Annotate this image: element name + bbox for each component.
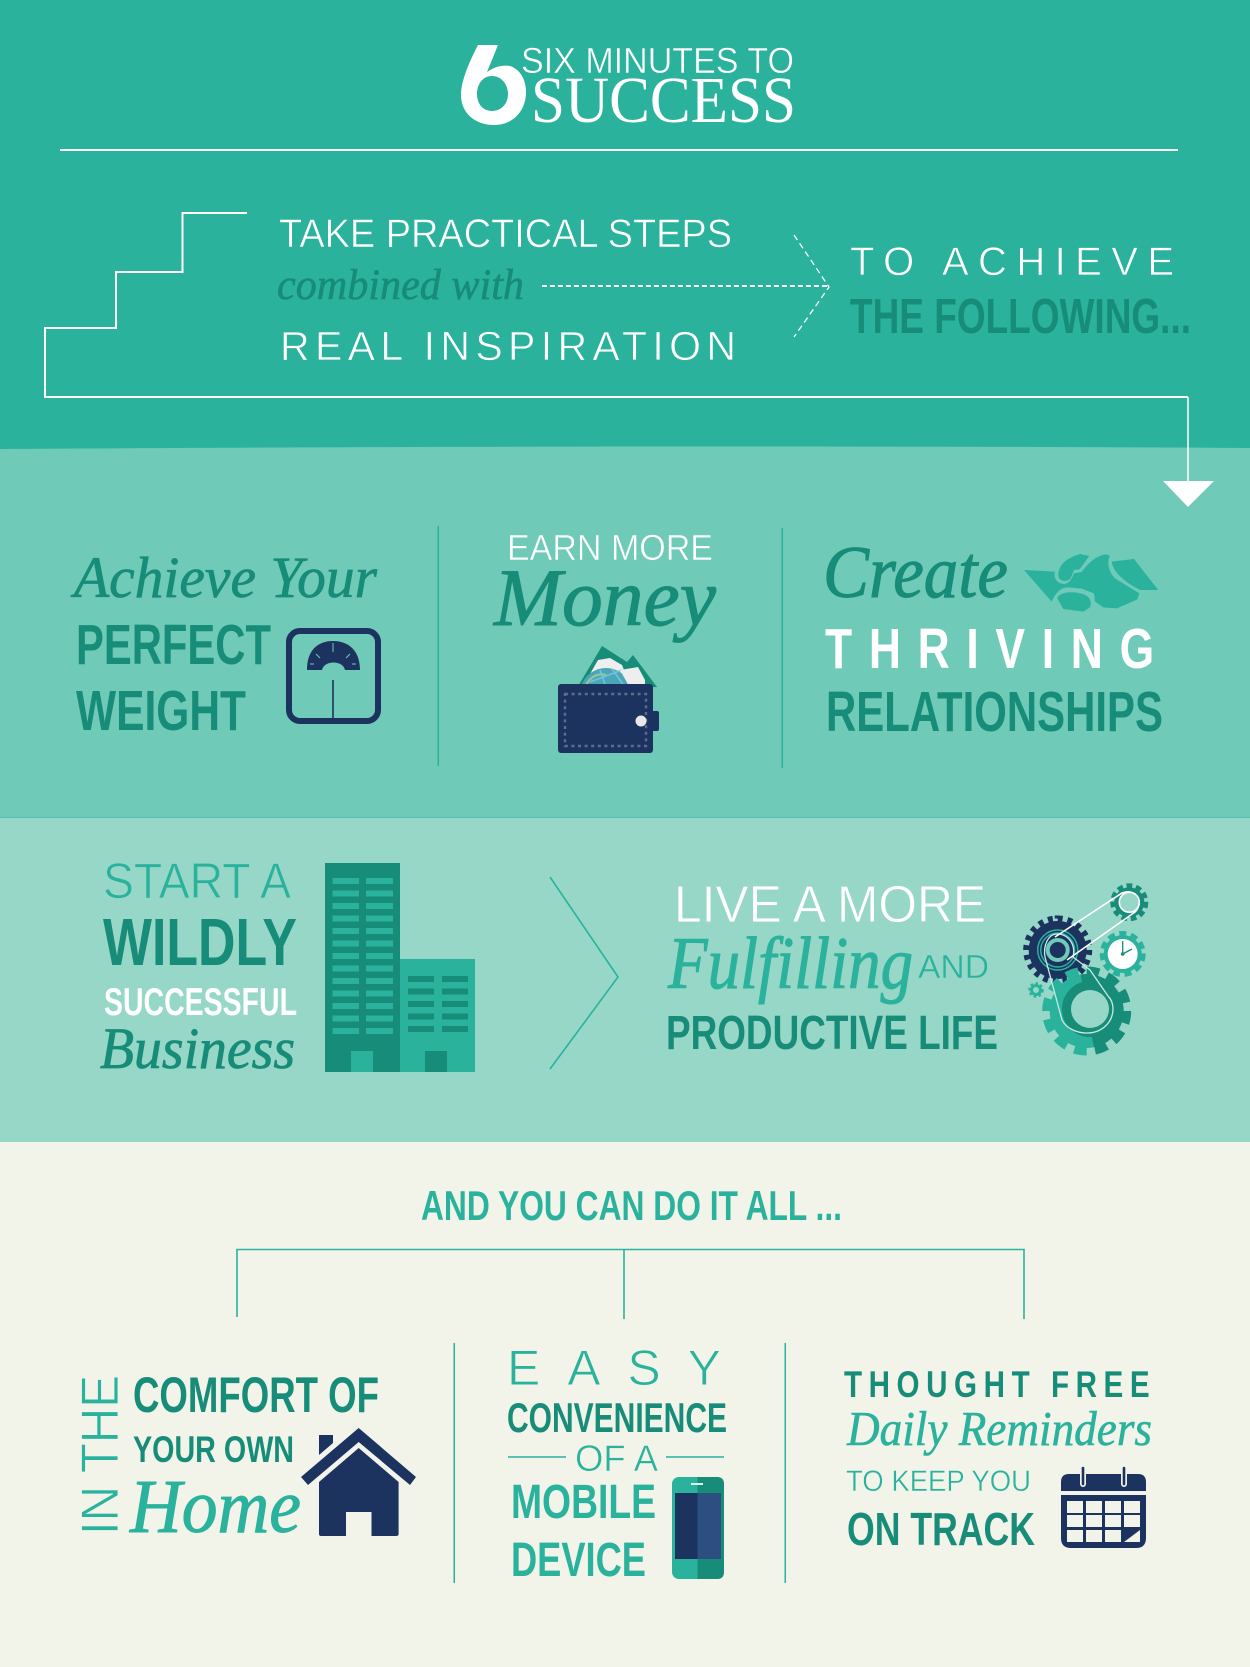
goal: thriving relationships — [823, 532, 1163, 744]
text: start a: START A — [103, 853, 292, 909]
icon: calendar — [1061, 1468, 1146, 1548]
title line: six minutes to: SIX MINUTES TO — [521, 40, 794, 81]
text: productive life: PRODUCTIVE LIFE — [666, 1007, 998, 1060]
script: fulfilling: Fulfilling — [667, 923, 913, 1005]
text: in the (vertical): IN THE — [71, 1375, 130, 1535]
text: live a more: LIVE A MORE — [674, 876, 986, 934]
text: mobile: MOBILE — [511, 1476, 656, 1529]
text: weight: WEIGHT — [76, 679, 246, 743]
goal: perfect weight — [70, 545, 378, 743]
title logo — [461, 40, 796, 137]
arrow: staircase line with arrowhead — [45, 213, 1214, 507]
icon: office buildings — [325, 863, 475, 1072]
panel: how to do it — [0, 1142, 1250, 1667]
title line: success: SUCCESS — [531, 64, 796, 137]
text: convenience: CONVENIENCE — [507, 1394, 727, 1441]
icon: handshake — [1024, 554, 1158, 612]
heading: and you can do it all: AND YOU CAN DO IT ALL ... — [421, 1182, 842, 1229]
arrow: large chevron — [550, 877, 618, 1069]
text: combined with: combined with — [277, 262, 524, 309]
text: on track: ON TRACK — [847, 1503, 1035, 1555]
text: of a: OF A — [575, 1438, 658, 1479]
text: take practical steps: TAKE PRACTICAL STEPS — [279, 212, 732, 256]
icon: smartphone — [672, 1477, 724, 1579]
text: your own: YOUR OWN — [133, 1429, 294, 1470]
text: earn more: EARN MORE — [507, 527, 713, 568]
goal: successful business — [100, 853, 475, 1081]
panel: header and intro — [0, 0, 1250, 450]
panel: first goals row — [0, 446, 1250, 818]
arrow: dashed pointer — [542, 235, 829, 337]
text: thought free: THOUGHT FREE — [844, 1365, 1150, 1406]
option: mobile device — [507, 1340, 727, 1587]
bracket connector — [237, 1250, 1024, 1319]
icon: numeral six — [461, 45, 526, 125]
text: device: DEVICE — [511, 1534, 646, 1587]
icon: gears — [1026, 886, 1146, 1051]
script: home: Home — [129, 1465, 301, 1549]
icon: wallet — [558, 646, 659, 753]
text: easy: EASY — [507, 1340, 721, 1396]
option: comfort of home — [71, 1367, 416, 1549]
text: real inspiration: REAL INSPIRATION — [280, 323, 736, 369]
text: successful: SUCCESSFUL — [104, 981, 297, 1024]
script: business: Business — [100, 1016, 295, 1081]
icon: bathroom scale — [289, 631, 378, 721]
goal: earn more money — [493, 527, 717, 753]
script: money: Money — [493, 552, 717, 643]
text: perfect: PERFECT — [76, 613, 271, 677]
icon: house — [301, 1428, 416, 1536]
script: daily reminders: Daily Reminders — [846, 1401, 1152, 1456]
text: and: AND — [918, 948, 989, 985]
script: create: Create — [823, 532, 1008, 614]
goal: fulfilling life — [666, 876, 1146, 1060]
text: comfort of: COMFORT OF — [133, 1367, 379, 1423]
text: thriving: THRIVING — [825, 617, 1154, 680]
panel: second goals row — [0, 817, 1250, 1142]
option: daily reminders — [844, 1365, 1152, 1555]
text: wildly: WILDLY — [103, 905, 297, 980]
text: to achieve: TO ACHIEVE — [850, 240, 1174, 284]
text: to keep you: TO KEEP YOU — [846, 1465, 1031, 1498]
script: achieve your: Achieve Your — [70, 545, 377, 610]
